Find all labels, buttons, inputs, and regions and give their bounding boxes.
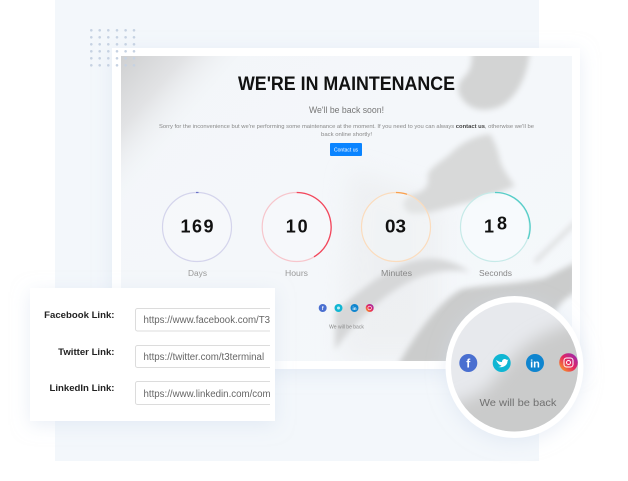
dot grid — [90, 29, 135, 67]
panel: social links form — [30, 288, 307, 421]
small social icons: in — [352, 306, 357, 311]
facebook field: Facebook Link: — [44, 310, 114, 321]
twitter field: Twitter Link: — [58, 347, 114, 358]
countdown: hours: Hours — [285, 269, 308, 278]
countdown: minutes: Minutes — [381, 269, 412, 278]
linkedin field — [49, 382, 302, 404]
linkedin field: https://www.linkedin.com/company/t3 — [144, 389, 302, 400]
small footer text: We will be back — [329, 324, 364, 330]
twitter field — [58, 346, 286, 368]
countdown: days: Days — [188, 269, 207, 278]
contact us button — [330, 143, 362, 156]
contact us button: Contact us — [334, 148, 358, 154]
countdown: minutes: 03 — [385, 216, 406, 236]
message text — [159, 124, 534, 138]
message text: back online shortly! — [321, 132, 372, 138]
facebook field — [44, 308, 270, 332]
linkedin icon — [526, 354, 544, 372]
background panel — [55, 0, 539, 461]
small social icons — [319, 304, 374, 312]
countdown: seconds: Seconds — [479, 269, 512, 278]
linkedin icon: in — [530, 358, 540, 370]
countdown: minutes — [362, 192, 430, 278]
twitter icon — [493, 354, 511, 372]
countdown: days — [162, 192, 232, 278]
countdown: hours — [262, 192, 331, 278]
linkedin field: LinkedIn Link: — [49, 383, 114, 394]
message text: Sorry for the inconvenience but we're performing some maintenance at the moment. If you need to you can always contact us , otherwise we'll be — [159, 124, 534, 130]
countdown: seconds — [460, 192, 530, 278]
subtitle: We'll be back soon! — [309, 105, 384, 115]
small social icons: f — [322, 306, 324, 312]
magnified footer text: We will be back — [480, 397, 557, 409]
instagram icon — [559, 353, 578, 372]
facebook icon: f — [466, 356, 471, 370]
countdown: hours: 10 — [286, 216, 308, 236]
facebook field: https://www.facebook.com/T3Terminal — [144, 315, 307, 326]
countdown: seconds: 8 — [497, 214, 507, 234]
title: WE'RE IN MAINTENANCE — [238, 73, 455, 95]
magnifier callout — [444, 296, 586, 441]
countdown: seconds: 1 — [484, 216, 494, 236]
twitter field: https://twitter.com/t3terminal — [144, 352, 264, 363]
facebook icon — [459, 354, 477, 372]
countdown: days: 169 — [180, 216, 214, 236]
panel: maintenance page card — [112, 48, 580, 369]
leaf shadows photo — [121, 50, 576, 365]
